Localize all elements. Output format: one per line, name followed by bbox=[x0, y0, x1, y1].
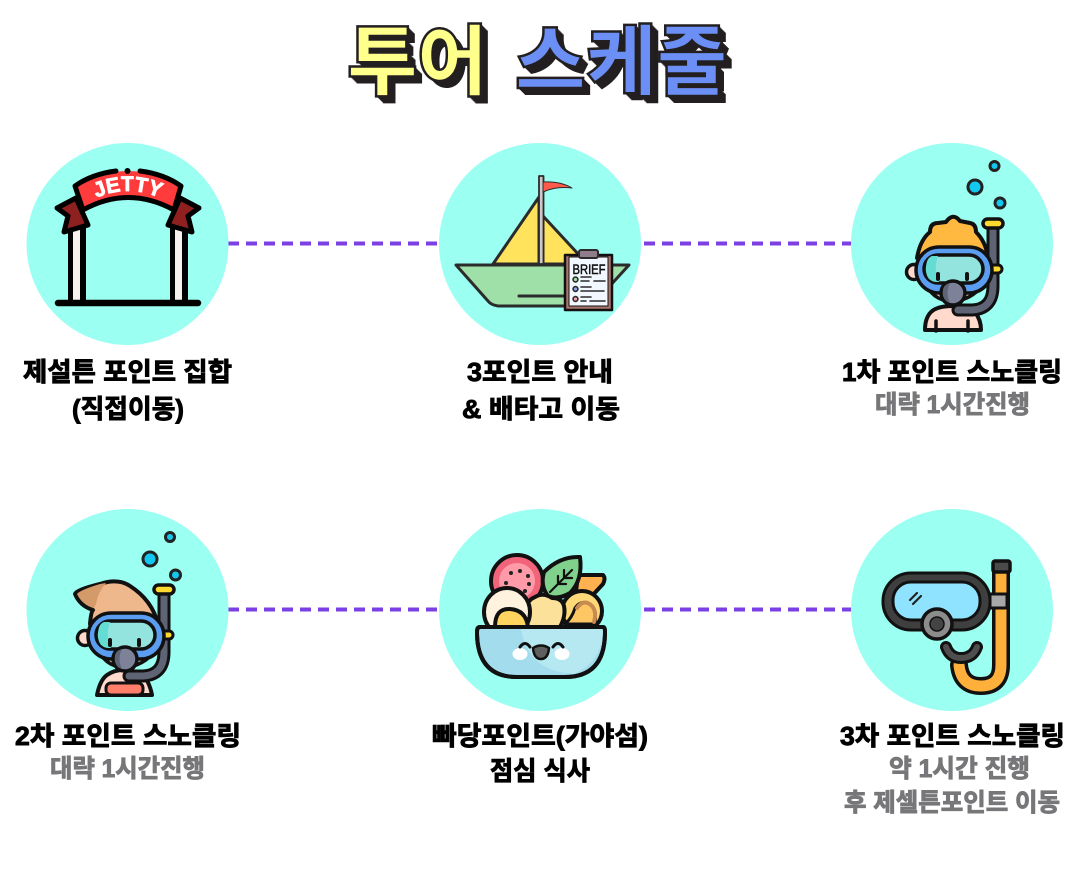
icon: snorkeler with brown hair bbox=[75, 532, 180, 695]
label: 2차 포인트 스노클링 bbox=[15, 721, 241, 751]
circle background bbox=[439, 509, 641, 711]
icon: jetty arch bbox=[54, 168, 202, 306]
label: 약 1시간 진행 bbox=[889, 755, 1030, 783]
circle background bbox=[851, 509, 1053, 711]
label: & 배타고 이동 bbox=[462, 394, 620, 424]
label: 대략 1시간진행 bbox=[50, 755, 205, 783]
circle background bbox=[439, 143, 641, 345]
label: (직접이동) bbox=[72, 394, 184, 424]
step 6: third snorkeling bbox=[840, 509, 1065, 817]
icon: snorkel mask bbox=[883, 561, 1010, 686]
circle background bbox=[26, 143, 228, 345]
icon: salad bowl bbox=[477, 555, 605, 677]
icon: boat and clipboard bbox=[456, 176, 629, 310]
label: 3차 포인트 스노클링 bbox=[840, 721, 1065, 751]
label bbox=[840, 721, 1065, 817]
title bbox=[347, 20, 732, 106]
label: 후 제셀튼포인트 이동 bbox=[844, 789, 1060, 817]
label: 빠당포인트(가야섬) bbox=[432, 721, 648, 751]
label bbox=[842, 357, 1062, 419]
label bbox=[23, 357, 232, 424]
circle background bbox=[851, 143, 1053, 345]
icon text: BRIEF: BRIEF bbox=[572, 261, 606, 277]
icon text: JETTY: JETTY bbox=[94, 176, 164, 197]
label bbox=[462, 357, 620, 424]
label: 3포인트 안내 bbox=[467, 357, 613, 387]
step 1: jetty bbox=[23, 143, 232, 424]
label bbox=[15, 721, 241, 783]
label bbox=[432, 721, 648, 786]
title: 스케줄 bbox=[515, 20, 728, 106]
label: 대략 1시간진행 bbox=[875, 391, 1030, 419]
title: 투어 bbox=[347, 20, 487, 106]
step 2: boat bbox=[439, 143, 641, 424]
icon: snorkeler with orange hair bbox=[906, 162, 1005, 331]
step 4: second snorkeling bbox=[15, 509, 241, 783]
circle background bbox=[26, 509, 228, 711]
label: 1차 포인트 스노클링 bbox=[842, 357, 1062, 387]
step 5: lunch bbox=[432, 509, 648, 786]
label: 제설튼 포인트 집합 bbox=[23, 357, 232, 387]
label: 점심 식사 bbox=[490, 756, 590, 786]
step 3: first snorkeling bbox=[842, 143, 1062, 419]
